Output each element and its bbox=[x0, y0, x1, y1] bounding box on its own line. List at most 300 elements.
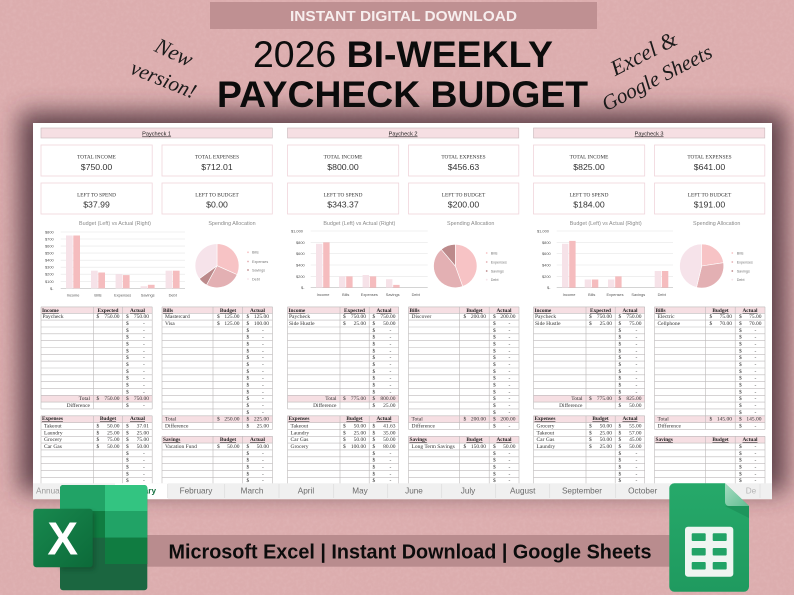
table: expenses: $ bbox=[96, 443, 100, 450]
title: 2026 BI-WEEKLY bbox=[253, 33, 553, 75]
table: expenses: Actual bbox=[130, 416, 146, 422]
table: income: Expected bbox=[98, 308, 118, 314]
tables: income, expenses, bills, savings: $ bbox=[710, 313, 712, 320]
table: bills: Budget bbox=[220, 308, 236, 314]
tables: income, expenses, bills, savings: $ bbox=[739, 416, 742, 423]
tables: income, expenses, bills, savings: 100.00 bbox=[351, 444, 366, 450]
tables: income, expenses, bills, savings: 50.00 bbox=[503, 444, 516, 450]
icon: google sheets bbox=[669, 483, 749, 592]
summary cards bbox=[570, 155, 732, 210]
tables: income, expenses, bills, savings: $ bbox=[589, 436, 592, 443]
tables: income, expenses, bills, savings: $ bbox=[710, 416, 712, 423]
bar chart: budget vs actual: $400 bbox=[296, 262, 305, 268]
sheet tabs: De bbox=[746, 486, 757, 496]
pie chart: spending allocation: Savings bbox=[252, 268, 265, 272]
table: income: $ bbox=[96, 313, 100, 320]
table: expenses: 25.00 bbox=[137, 430, 149, 436]
table: income: Actual bbox=[130, 308, 146, 314]
banner: instant digital download: INSTANT DIGITAL DOWNLOAD bbox=[290, 9, 517, 25]
table: income: $ bbox=[126, 395, 129, 402]
sheet drop shadow bbox=[20, 112, 786, 492]
bar chart: budget vs actual: $200 bbox=[542, 274, 551, 279]
sheet tabs: Annual bbox=[36, 486, 62, 496]
summary cards: TOTAL INCOME bbox=[570, 155, 608, 161]
summary cards: $712.01 bbox=[201, 162, 233, 172]
tables: income, expenses, bills, savings bbox=[534, 308, 762, 484]
tables: income, expenses, bills, savings: Difference bbox=[559, 402, 583, 409]
tables: income, expenses, bills, savings: $ bbox=[589, 395, 592, 402]
table: income: $- bbox=[126, 402, 145, 409]
table: income: 750.00 bbox=[134, 314, 149, 320]
table: bills: $-$-$-$-$-$-$-$-$-$-$-$-$- bbox=[246, 327, 264, 416]
tables: income, expenses, bills, savings: $ bbox=[372, 395, 376, 402]
tables: income, expenses, bills, savings: Laundry bbox=[536, 444, 555, 450]
tables: income, expenses, bills, savings: Total bbox=[658, 417, 669, 423]
table: bills: Bills bbox=[163, 308, 173, 314]
pie chart: spending allocation bbox=[680, 221, 753, 288]
tables: income, expenses, bills, savings: Takeout bbox=[536, 430, 555, 436]
table: savings: $-$-$-$-$- bbox=[246, 450, 264, 484]
tables: income, expenses, bills, savings: 750.00 bbox=[597, 314, 612, 320]
pie chart: spending allocation: Spending Allocation bbox=[208, 221, 256, 227]
summary cards: $641.00 bbox=[694, 162, 725, 172]
tables: income, expenses, bills, savings: Paycheck bbox=[289, 314, 310, 320]
table: bills: 125.00 bbox=[254, 314, 269, 320]
table: expenses: 25.00 bbox=[107, 430, 120, 436]
tables: income, expenses, bills, savings: 80.00 bbox=[383, 444, 396, 450]
pie chart: spending allocation: Savings bbox=[491, 269, 504, 273]
tables: income, expenses, bills, savings: 75.00 bbox=[749, 314, 762, 320]
bar chart: budget vs actual: $700 bbox=[45, 236, 54, 242]
bar chart: budget vs actual: Debt bbox=[169, 292, 178, 298]
tables: income, expenses, bills, savings: $ bbox=[589, 429, 592, 436]
tables: income, expenses, bills, savings: $-$-$-$-$-$-$-$-$-$-$-$-$-$- bbox=[493, 320, 510, 416]
table: bills: Difference bbox=[165, 422, 189, 430]
tables: income, expenses, bills, savings: Paycheck bbox=[535, 314, 556, 320]
table: expenses: Car Gas bbox=[44, 444, 62, 450]
sheet tabs bbox=[33, 483, 772, 499]
tables: income, expenses, bills, savings: 50.00 bbox=[600, 437, 612, 443]
table: bills: 125.00 bbox=[224, 321, 240, 327]
tables: income, expenses, bills, savings: Savings bbox=[410, 437, 427, 443]
heading: paycheck 3: Paycheck 3 bbox=[635, 132, 664, 138]
bar chart: budget vs actual: $800 bbox=[45, 230, 54, 234]
tables: income, expenses, bills, savings: $ bbox=[589, 313, 592, 320]
tables: income, expenses, bills, savings: $ bbox=[372, 436, 376, 443]
table: savings: Vacation Fund bbox=[165, 444, 197, 450]
bar chart: budget vs actual: $- bbox=[301, 285, 305, 290]
script note: excel and google sheets: Google Sheets bbox=[598, 40, 716, 116]
tables: income, expenses, bills, savings: Budget bbox=[712, 308, 729, 314]
tables: income, expenses, bills, savings: 25.00 bbox=[354, 430, 366, 436]
bar chart: budget vs actual: Debt bbox=[412, 292, 421, 297]
table: savings: Actual bbox=[250, 437, 266, 443]
tables: income, expenses, bills, savings: 75.00 bbox=[720, 314, 732, 320]
table: income: Income bbox=[42, 308, 59, 314]
tables: income, expenses, bills, savings: $-$-$-$-$-$-$-$-$-$- bbox=[372, 327, 392, 395]
summary cards: LEFT TO SPEND bbox=[77, 193, 116, 199]
bar chart: budget vs actual: $1,000 bbox=[291, 228, 304, 234]
pie chart: spending allocation: Expenses bbox=[252, 260, 268, 264]
bar chart: budget vs actual: $200 bbox=[296, 274, 305, 279]
tables: income, expenses, bills, savings bbox=[288, 308, 516, 484]
summary cards bbox=[77, 155, 240, 210]
spreadsheet screenshot bbox=[33, 123, 772, 499]
summary cards: $37.99 bbox=[83, 200, 110, 210]
table: savings: 50.00 bbox=[257, 444, 269, 450]
table: income bbox=[42, 308, 149, 409]
table: expenses: Expenses bbox=[42, 416, 63, 422]
bar chart: budget vs actual: $200 bbox=[45, 272, 54, 277]
tables: income, expenses, bills, savings: $ bbox=[618, 436, 622, 443]
sheet tabs: September bbox=[562, 486, 602, 496]
tables: income, expenses, bills, savings: 200.00 bbox=[471, 417, 486, 423]
tables: income, expenses, bills, savings: Discover bbox=[412, 314, 432, 320]
tables: income, expenses, bills, savings: $ bbox=[589, 422, 592, 430]
tables: income, expenses, bills, savings: $-$-$-$-$-$-$-$-$-$-$-$-$- bbox=[739, 327, 756, 416]
bar chart: budget vs actual: $800 bbox=[542, 240, 551, 245]
pie chart: spending allocation: Savings bbox=[737, 269, 750, 273]
table: bills: Mastercard bbox=[165, 314, 190, 320]
tables: income, expenses, bills, savings: Grocery bbox=[290, 444, 309, 450]
tables: income, expenses, bills, savings: $ bbox=[493, 313, 496, 320]
tables: income, expenses, bills, savings: $-$-$-$-$-$-$-$-$-$- bbox=[618, 327, 638, 395]
pie chart: spending allocation: Bills bbox=[252, 251, 259, 255]
tables: income, expenses, bills, savings: Difference bbox=[313, 402, 337, 409]
tables: income, expenses, bills, savings: 50.00 bbox=[354, 424, 366, 430]
tables: income, expenses, bills, savings: Cellphone bbox=[658, 321, 681, 327]
table: expenses: 75.00 bbox=[137, 437, 149, 443]
table: bills bbox=[163, 308, 269, 430]
table: income: 750.00 bbox=[104, 314, 120, 320]
tables: income, expenses, bills, savings: $ bbox=[372, 422, 376, 430]
tables: income, expenses, bills, savings: $ bbox=[372, 429, 376, 436]
tables: income, expenses, bills, savings: $ bbox=[343, 395, 346, 402]
tables: income, expenses, bills, savings: $ bbox=[464, 443, 466, 450]
summary cards: $825.00 bbox=[573, 162, 605, 172]
tables: income, expenses, bills, savings: $ bbox=[372, 443, 376, 450]
heading: paycheck 2: Paycheck 2 bbox=[389, 132, 418, 138]
bar chart: budget vs actual: Debt bbox=[658, 292, 667, 297]
tables: income, expenses, bills, savings: Laundry bbox=[290, 430, 309, 436]
tables: income, expenses, bills, savings: Budget bbox=[466, 308, 483, 314]
tables: income, expenses, bills, savings: 800.00 bbox=[380, 396, 396, 402]
script note: new version: New bbox=[150, 32, 197, 72]
tables: income, expenses, bills, savings: Budget bbox=[712, 437, 729, 443]
summary cards bbox=[324, 155, 486, 210]
table: expenses: Takeout bbox=[44, 424, 62, 430]
table: bills: 100.00 bbox=[254, 321, 269, 327]
table: expenses: $ bbox=[96, 429, 100, 436]
table: income: 750.00 bbox=[134, 396, 149, 402]
table: income: Difference bbox=[67, 402, 91, 409]
tables: income, expenses, bills, savings: 750.00 bbox=[351, 314, 366, 320]
panel: paycheck 3 bbox=[534, 128, 765, 484]
bar chart: budget vs actual: Savings bbox=[631, 292, 645, 297]
table: income: $ bbox=[96, 395, 100, 402]
bar chart: budget vs actual: $600 bbox=[296, 251, 305, 256]
tables: income, expenses, bills, savings: Actual bbox=[622, 416, 638, 422]
table: savings: 50.00 bbox=[227, 444, 240, 450]
pie chart: spending allocation: Spending Allocation bbox=[693, 221, 740, 227]
table: expenses: 50.00 bbox=[137, 444, 149, 450]
tables: income, expenses, bills, savings: 200.00 bbox=[500, 314, 516, 320]
tables: income, expenses, bills, savings: Budget bbox=[592, 416, 609, 422]
bar chart: budget vs actual bbox=[291, 221, 428, 297]
tables: income, expenses, bills, savings: Total bbox=[571, 396, 583, 402]
table: expenses: $ bbox=[126, 436, 129, 443]
tables: income, expenses, bills, savings: $ bbox=[739, 320, 742, 327]
bar chart: budget vs actual: $500 bbox=[45, 251, 54, 256]
table: expenses: Laundry bbox=[44, 430, 63, 436]
summary cards: TOTAL INCOME bbox=[324, 155, 362, 161]
sheet tabs: October bbox=[628, 486, 658, 496]
tables: income, expenses, bills, savings: $ bbox=[618, 320, 622, 327]
bar chart: budget vs actual: Bills bbox=[94, 292, 102, 298]
bar chart: budget vs actual: Savings bbox=[141, 292, 155, 298]
tables: income, expenses, bills, savings: Car Gas bbox=[290, 437, 308, 443]
sheet tabs: May bbox=[352, 486, 369, 496]
tables: income, expenses, bills, savings: 25.00 bbox=[383, 403, 396, 409]
bottom banner bbox=[140, 535, 675, 567]
tables: income, expenses, bills, savings: 55.00 bbox=[629, 424, 642, 430]
table: bills: $ bbox=[246, 320, 250, 327]
tables: income, expenses, bills, savings: Actual bbox=[496, 437, 512, 443]
script note: new version: version! bbox=[127, 55, 200, 104]
table: bills: Actual bbox=[250, 308, 266, 314]
summary cards: LEFT TO SPEND bbox=[570, 193, 609, 199]
tables: income, expenses, bills, savings: 775.00 bbox=[351, 396, 366, 402]
panel: paycheck 1 bbox=[41, 128, 272, 484]
table: savings: Budget bbox=[220, 437, 236, 443]
tables: income, expenses, bills, savings: $-$-$-$-$-$- bbox=[739, 443, 756, 484]
tables: income, expenses, bills, savings: $ bbox=[343, 443, 346, 450]
banner: instant digital download bbox=[210, 2, 597, 29]
tables: income, expenses, bills, savings: $-$-$-$-$- bbox=[372, 450, 392, 484]
tables: income, expenses, bills, savings: $ bbox=[710, 320, 712, 327]
tables: income, expenses, bills, savings: $ bbox=[372, 320, 376, 327]
tables: income, expenses, bills, savings: 145.00 bbox=[746, 417, 762, 423]
tables: income, expenses, bills, savings: 750.00 bbox=[380, 314, 396, 320]
tables: income, expenses, bills, savings: 25.00 bbox=[354, 321, 366, 327]
pie chart: spending allocation: Spending Allocation bbox=[447, 221, 494, 227]
bar chart: budget vs actual: $100 bbox=[45, 279, 54, 284]
tables: income, expenses, bills, savings: 145.00 bbox=[717, 417, 732, 423]
summary cards: $800.00 bbox=[327, 162, 359, 172]
summary cards: $0.00 bbox=[206, 200, 228, 210]
table: savings bbox=[163, 437, 269, 484]
tables: income, expenses, bills, savings: 200.00 bbox=[471, 314, 486, 320]
tables: income, expenses, bills, savings: $ bbox=[343, 422, 346, 430]
pie chart: spending allocation: Expenses bbox=[491, 260, 507, 264]
tables: income, expenses, bills, savings: $ bbox=[464, 416, 466, 423]
tables: income, expenses, bills, savings: Expenses bbox=[534, 416, 555, 422]
tables: income, expenses, bills, savings: Difference bbox=[412, 422, 435, 430]
table: expenses: 37.01 bbox=[137, 424, 149, 430]
tables: income, expenses, bills, savings: Expected bbox=[344, 308, 365, 314]
sheet tabs: March bbox=[241, 486, 264, 496]
summary cards: LEFT TO BUDGET bbox=[195, 193, 240, 199]
table: bills: 250.00 bbox=[224, 417, 240, 423]
tables: income, expenses, bills, savings: 825.00 bbox=[626, 396, 642, 402]
tables: income, expenses, bills, savings: Bills bbox=[410, 308, 420, 314]
tables: income, expenses, bills, savings: $ bbox=[618, 313, 622, 320]
bar chart: budget vs actual: Bills bbox=[342, 292, 349, 297]
summary cards: TOTAL EXPENSES bbox=[687, 155, 732, 161]
tables: income, expenses, bills, savings: $ bbox=[343, 320, 346, 327]
heading: paycheck 1: Paycheck 1 bbox=[142, 132, 171, 138]
sheet tabs: July bbox=[461, 486, 476, 496]
bar chart: budget vs actual: $400 bbox=[45, 258, 54, 263]
tables: income, expenses, bills, savings: $ bbox=[464, 313, 466, 320]
tables: income, expenses, bills, savings: 200.00 bbox=[500, 417, 516, 423]
table: expenses: $ bbox=[126, 422, 129, 430]
summary cards: TOTAL EXPENSES bbox=[195, 155, 239, 161]
pie chart: spending allocation: Expenses bbox=[737, 260, 753, 264]
tables: income, expenses, bills, savings: Actual bbox=[742, 308, 758, 314]
summary cards: LEFT TO BUDGET bbox=[688, 193, 732, 199]
table: bills: Visa bbox=[165, 321, 175, 327]
summary cards: LEFT TO SPEND bbox=[324, 193, 363, 199]
table: expenses: Budget bbox=[100, 416, 116, 422]
tables: income, expenses, bills, savings: Grocery bbox=[536, 424, 555, 430]
tables: income, expenses, bills, savings: Income bbox=[288, 308, 306, 314]
table: income: 750.00 bbox=[104, 396, 120, 402]
tables: income, expenses, bills, savings: Side Hustle bbox=[289, 321, 315, 327]
table: expenses: Grocery bbox=[44, 437, 62, 443]
table: bills: $ bbox=[217, 416, 220, 423]
bar chart: budget vs actual: $600 bbox=[45, 244, 54, 249]
summary cards: $456.63 bbox=[448, 162, 479, 172]
bar chart: budget vs actual: Income bbox=[563, 292, 575, 297]
table: bills: $ bbox=[217, 320, 220, 327]
table: bills: 225.00 bbox=[254, 417, 269, 423]
bar chart: budget vs actual: $400 bbox=[542, 262, 551, 268]
title bbox=[217, 33, 588, 115]
summary cards: TOTAL INCOME bbox=[77, 155, 116, 161]
tables: income, expenses, bills, savings: $ bbox=[618, 429, 622, 436]
tables: income, expenses, bills, savings: 25.00 bbox=[600, 444, 612, 450]
bar chart: budget vs actual: $1,000 bbox=[537, 228, 550, 234]
tables: income, expenses, bills, savings: $ bbox=[618, 402, 622, 409]
table: income: $ bbox=[126, 313, 129, 320]
table: income: Total bbox=[79, 396, 90, 402]
tables: income, expenses, bills, savings: 25.00 bbox=[600, 321, 612, 327]
tables: income, expenses, bills, savings: $ bbox=[589, 320, 592, 327]
script note: excel and google sheets: Excel & bbox=[605, 26, 682, 81]
tables: income, expenses, bills, savings: 45.00 bbox=[629, 437, 642, 443]
icon: microsoft excel: X bbox=[47, 512, 78, 564]
tables: income, expenses, bills, savings: 50.00 bbox=[629, 444, 642, 450]
bar chart: budget vs actual: Savings bbox=[386, 292, 400, 297]
table: bills: Total bbox=[165, 417, 177, 423]
tables: income, expenses, bills, savings: 50.00 bbox=[354, 437, 366, 443]
sheet tabs: April bbox=[298, 486, 314, 496]
bar chart: budget vs actual: $800 bbox=[296, 240, 305, 245]
panel: paycheck 2 bbox=[288, 128, 519, 484]
table: bills: 25.00 bbox=[257, 424, 269, 430]
tables: income, expenses, bills, savings: $ bbox=[618, 443, 622, 450]
bar chart: budget vs actual: Bills bbox=[588, 292, 595, 297]
table: expenses bbox=[42, 416, 149, 484]
bar chart: budget vs actual: Income bbox=[317, 292, 329, 297]
table: expenses: 50.00 bbox=[107, 444, 120, 450]
summary cards: $184.00 bbox=[573, 200, 605, 210]
tables: income, expenses, bills, savings: Income bbox=[534, 308, 552, 314]
bar chart: budget vs actual: $- bbox=[547, 285, 551, 290]
sheet tabs: February bbox=[180, 486, 213, 496]
table: savings: Savings bbox=[163, 437, 180, 443]
tables: income, expenses, bills, savings: $-$-$-$-$- bbox=[493, 450, 510, 484]
sheet tabs: August bbox=[510, 486, 536, 496]
table: savings: $ bbox=[217, 443, 220, 450]
tables: income, expenses, bills, savings: Total bbox=[412, 417, 423, 423]
tables: income, expenses, bills, savings: $ bbox=[618, 395, 622, 402]
tables: income, expenses, bills, savings: $ bbox=[343, 436, 346, 443]
tables: income, expenses, bills, savings: Takeout bbox=[290, 424, 309, 430]
tables: income, expenses, bills, savings: 70.00 bbox=[749, 321, 762, 327]
tables: income, expenses, bills, savings: Difference bbox=[658, 422, 681, 430]
tables: income, expenses, bills, savings: 57.00 bbox=[629, 430, 642, 436]
bar chart: budget vs actual: Expenses bbox=[114, 292, 131, 298]
table: savings: $ bbox=[246, 443, 250, 450]
summary cards: $750.00 bbox=[81, 162, 112, 172]
table: bills: $ bbox=[246, 416, 250, 423]
tables: income, expenses, bills, savings: $ bbox=[372, 402, 376, 409]
tables: income, expenses, bills, savings: Expenses bbox=[288, 416, 309, 422]
sheet tabs: January bbox=[125, 486, 156, 496]
tables: income, expenses, bills, savings: Bills bbox=[656, 308, 666, 314]
table: bills: $ bbox=[246, 313, 250, 320]
icon: microsoft excel bbox=[33, 485, 147, 590]
tables: income, expenses, bills, savings: 35.00 bbox=[383, 430, 396, 436]
tables: income, expenses, bills, savings: $ bbox=[739, 313, 742, 320]
tables: income, expenses, bills, savings: Total bbox=[325, 396, 337, 402]
bar chart: budget vs actual: Expenses bbox=[606, 292, 624, 297]
table: expenses: 75.00 bbox=[107, 437, 120, 443]
tables: income, expenses, bills, savings: Expected bbox=[590, 308, 611, 314]
tables: income, expenses, bills, savings: Long Term Savings bbox=[412, 444, 455, 450]
tables: income, expenses, bills, savings: Actual bbox=[376, 308, 392, 314]
tables: income, expenses, bills, savings: 75.00 bbox=[629, 321, 642, 327]
pie chart: spending allocation bbox=[195, 221, 268, 288]
tables: income, expenses, bills, savings: $ bbox=[589, 443, 592, 450]
summary cards: LEFT TO BUDGET bbox=[442, 193, 486, 199]
tables: income, expenses, bills, savings: 50.00 bbox=[629, 403, 642, 409]
tables: income, expenses, bills, savings: 50.00 bbox=[383, 321, 396, 327]
tables: income, expenses, bills, savings: $ bbox=[493, 443, 496, 450]
pie chart: spending allocation: Bills bbox=[737, 251, 744, 255]
summary cards: TOTAL EXPENSES bbox=[441, 155, 486, 161]
summary cards: $343.37 bbox=[327, 200, 359, 210]
tables: income, expenses, bills, savings: 750.00 bbox=[626, 314, 642, 320]
table: expenses: 50.00 bbox=[107, 424, 120, 430]
sheet tabs: June bbox=[405, 486, 423, 496]
tables: income, expenses, bills, savings: 50.00 bbox=[600, 424, 612, 430]
table: expenses: $ bbox=[126, 429, 129, 436]
tables: income, expenses, bills, savings: Electric bbox=[658, 314, 675, 320]
tables: income, expenses, bills, savings: $-$-$-$-$- bbox=[618, 450, 638, 484]
tables: income, expenses, bills, savings: $ bbox=[618, 422, 622, 430]
bar chart: budget vs actual: Expenses bbox=[361, 292, 378, 297]
tables: income, expenses, bills, savings: Budget bbox=[466, 437, 483, 443]
tables: income, expenses, bills, savings: Actual bbox=[376, 416, 392, 422]
tables: income, expenses, bills, savings: 25.00 bbox=[600, 430, 612, 436]
table: bills: $ bbox=[217, 313, 220, 320]
tables: income, expenses, bills, savings: $ bbox=[493, 416, 496, 423]
tables: income, expenses, bills, savings: Car Gas bbox=[536, 437, 554, 443]
tables: income, expenses, bills, savings: $- bbox=[493, 422, 510, 430]
